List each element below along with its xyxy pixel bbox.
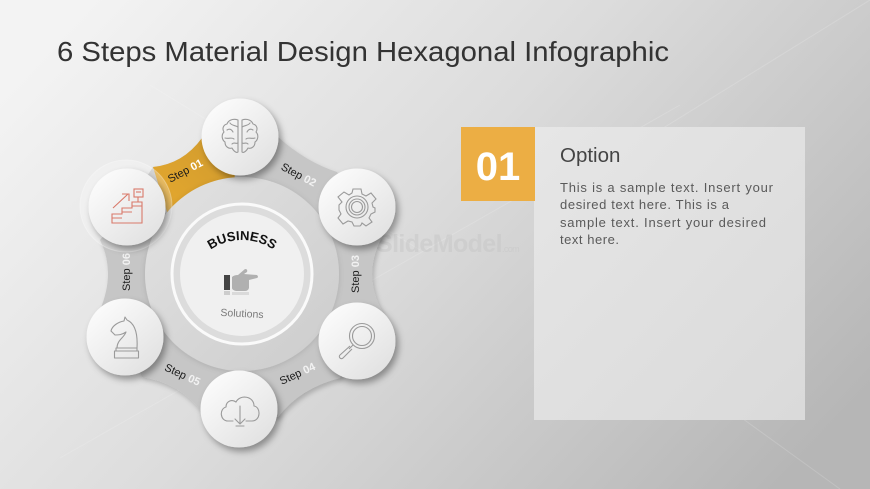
title: 6 Steps Material Design Hexagonal Infographic: [57, 36, 669, 67]
number badge: 01: [476, 145, 520, 189]
body text: text here.: [560, 232, 619, 247]
step 02 label: Step 02: [279, 161, 318, 190]
watermark: SlideModel.com: [376, 230, 519, 258]
node: chess knight: [86, 298, 164, 376]
info panel: [461, 127, 805, 420]
step 03 label: Step 03: [350, 255, 362, 293]
hexagonal diagram: [80, 98, 402, 456]
body text: desired text here. This is a: [560, 197, 730, 212]
curved label: business: BUSINESS: [206, 231, 276, 250]
step 06 label: Step 06: [121, 253, 133, 291]
step 04 label: Step 04: [278, 360, 318, 388]
node: magnifier: [318, 302, 396, 380]
body text: sample text. Insert your desired: [560, 215, 766, 230]
number badge: [461, 127, 535, 201]
hexagon band: [100, 137, 383, 417]
panel background: [534, 127, 805, 420]
segment highlight: step 01: [153, 138, 235, 215]
body text: [560, 180, 774, 247]
step 01 label: Step 01: [166, 157, 205, 186]
central disc: [145, 177, 339, 371]
option heading: Option: [560, 144, 620, 167]
node: stairs (active): [80, 160, 172, 252]
node: gear: [318, 168, 396, 246]
watermark: [343, 224, 519, 258]
step labels: [121, 157, 362, 389]
icon: pointing hand: [224, 269, 258, 295]
caption: solutions: Solutions: [220, 307, 264, 321]
inner ring: [172, 204, 312, 344]
body text: This is a sample text. Insert your: [560, 180, 774, 195]
node: cloud: [200, 370, 278, 448]
step 05 label: Step 05: [163, 362, 202, 389]
node: brain: [202, 98, 278, 176]
